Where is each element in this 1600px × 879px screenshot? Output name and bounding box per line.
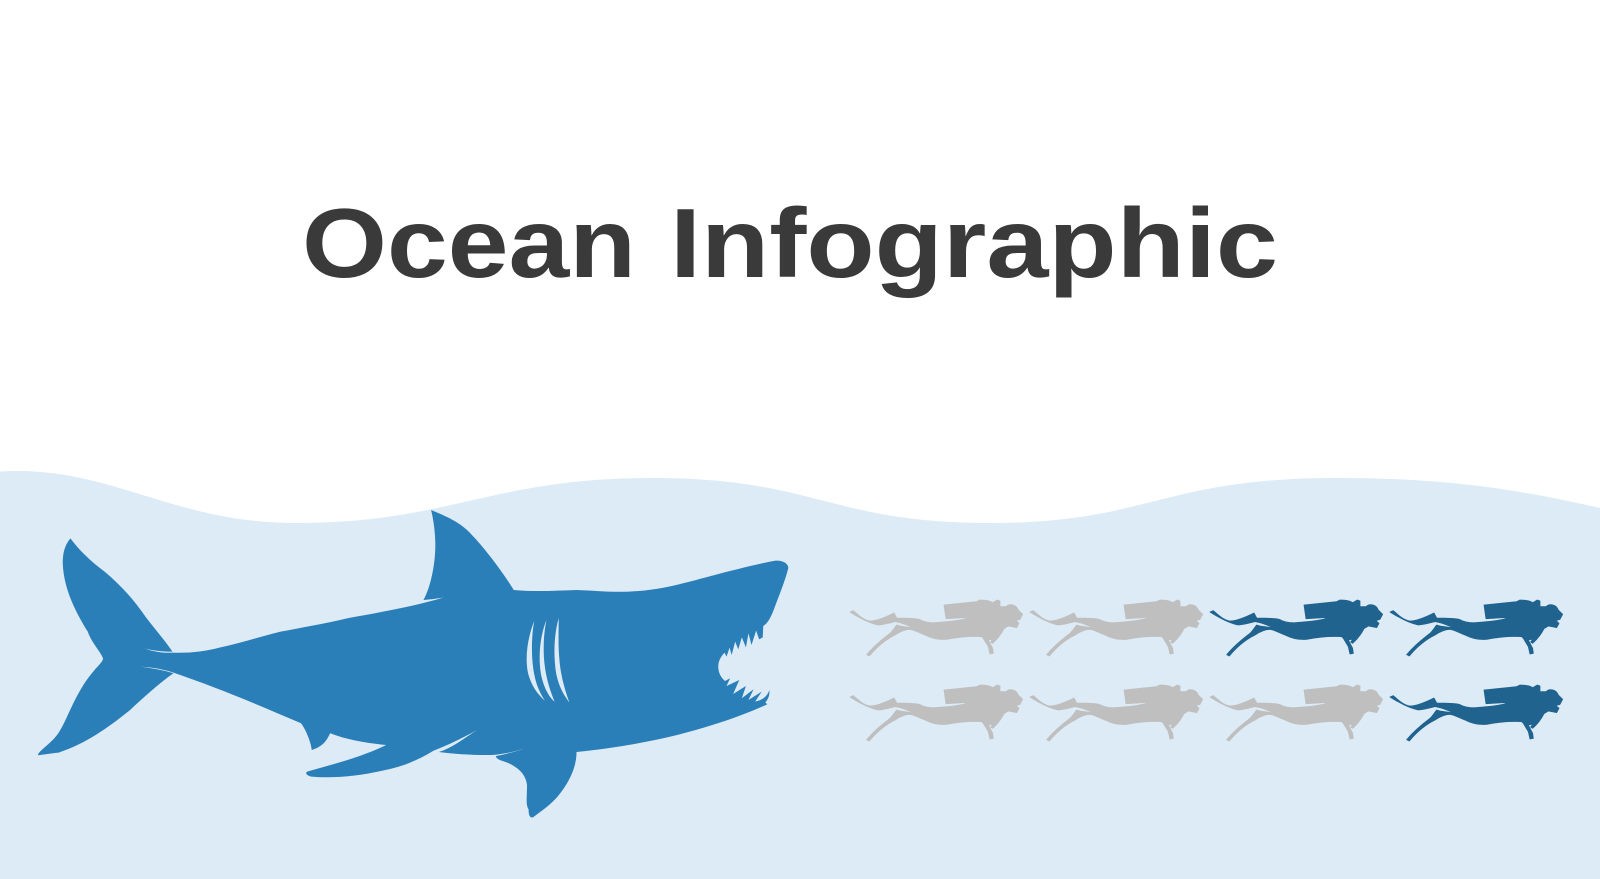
title: Ocean (302, 188, 636, 298)
diver row 2 column 1 (850, 685, 1023, 741)
shark gills (527, 618, 569, 703)
diver row 1 column 3 (1210, 600, 1383, 656)
diver row 1 column 4 (1390, 600, 1563, 656)
diver row 2 column 4 (1390, 685, 1563, 741)
icon: shark (38, 510, 788, 817)
diver row 1 column 2 (1030, 600, 1203, 656)
title: Infographic (670, 188, 1278, 298)
diver row 1 column 1 (850, 600, 1023, 656)
title (302, 188, 1278, 298)
diver row 2 column 3 (1210, 685, 1383, 741)
diver row 2 column 2 (1030, 685, 1203, 741)
ocean wave (0, 471, 1600, 879)
